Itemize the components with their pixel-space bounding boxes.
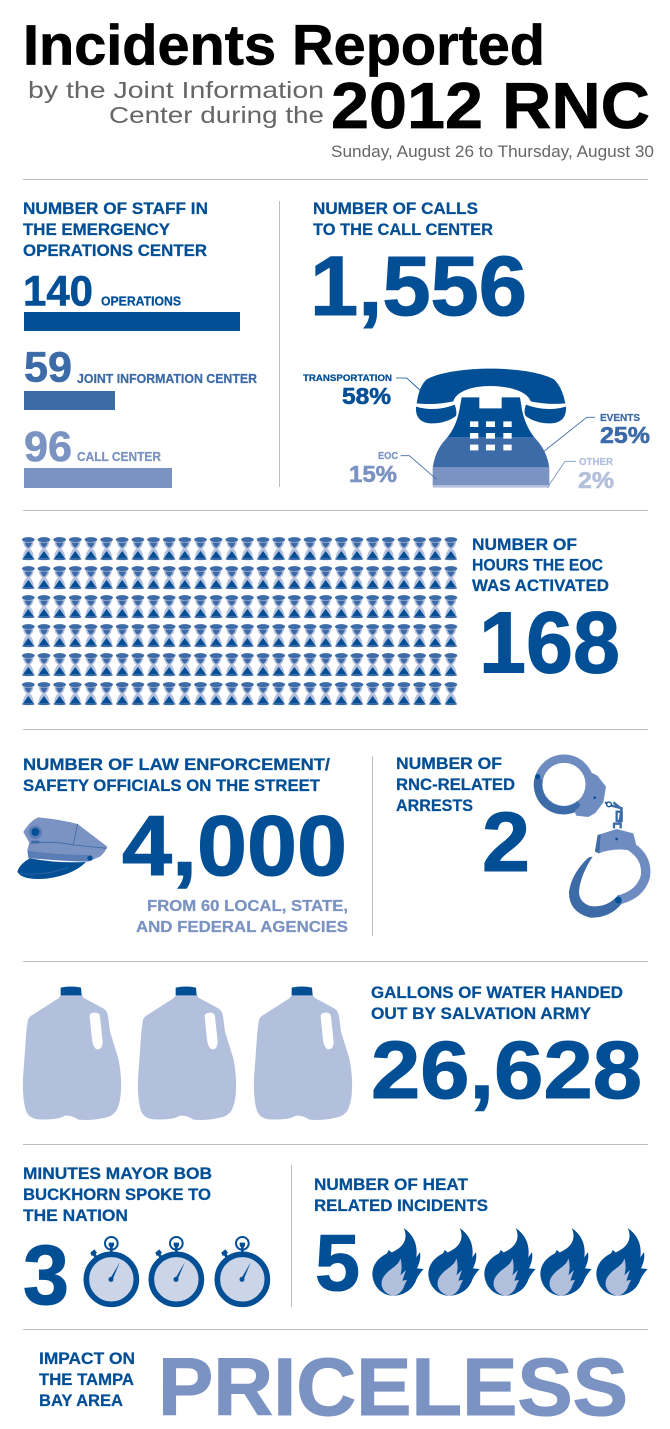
- heading: arrests: RNC-RELATED: [396, 776, 515, 794]
- stat: 59 joint information center: JOINT INFORMATION CENTER: [77, 372, 257, 386]
- caption: agencies: [136, 898, 348, 936]
- heading: hours: WAS ACTIVATED: [472, 577, 609, 595]
- stat: 140 operations: 140: [23, 268, 93, 316]
- big number: 5: 5: [315, 1218, 360, 1307]
- heading: minutes: BUCKHORN SPOKE TO: [23, 1186, 211, 1204]
- label: transportation 58%: TRANSPORTATION: [303, 373, 392, 384]
- icon: water jug 1: [23, 986, 121, 1120]
- label: events 25%: EVENTS: [600, 413, 640, 424]
- big number: 1,556: 1,556: [310, 239, 527, 333]
- heading: hours: [472, 536, 609, 595]
- subtitle: by the joint information center: [28, 77, 324, 128]
- big number: 2: 2: [482, 795, 530, 889]
- label: other 2%: OTHER: [579, 457, 614, 468]
- heading: law enforcement: [23, 756, 330, 795]
- heading: hours: NUMBER OF: [472, 536, 577, 554]
- stat: 96 call center: CALL CENTER: [77, 450, 161, 464]
- heading: law enforcement: NUMBER OF LAW ENFORCEMENT/: [23, 756, 330, 774]
- label: events 25%: [600, 413, 650, 448]
- icon: police cap: [17, 817, 107, 879]
- heading: gallons: GALLONS OF WATER HANDED: [371, 984, 623, 1002]
- heading: minutes: [23, 1165, 212, 1225]
- subtitle: by the joint information center: Center during the: [109, 102, 324, 128]
- heading: heat: [314, 1176, 488, 1215]
- icon: flame 5: [596, 1228, 648, 1296]
- stat: 59 joint information center: [24, 344, 257, 410]
- icon: stopwatch 1: [86, 1237, 136, 1304]
- big number: 4,000: 4,000: [122, 799, 347, 894]
- caption: agencies: FROM 60 LOCAL, STATE,: [147, 898, 348, 915]
- icon: flame 1: [372, 1228, 424, 1296]
- stat: 140 operations: [23, 268, 240, 331]
- panel: gallons of water: [23, 984, 642, 1120]
- label: eoc 15%: [349, 451, 398, 487]
- panel: impact: [39, 1342, 628, 1429]
- label: events 25%: 25%: [600, 422, 650, 448]
- heading: heat: NUMBER OF HEAT: [314, 1176, 468, 1194]
- panel: law enforcement officials: [17, 756, 348, 936]
- heading: arrests: NUMBER OF: [396, 755, 502, 773]
- icon: telephone chart: [396, 369, 595, 488]
- icon: water jug 2: [138, 986, 236, 1120]
- stat: 59 joint information center: 59: [24, 344, 72, 392]
- icon: stopwatch 3: [217, 1237, 267, 1304]
- heading: minutes: THE NATION: [23, 1207, 128, 1225]
- heading: calls: [313, 200, 493, 239]
- heading: impact: [39, 1350, 135, 1410]
- label: other 2%: 2%: [578, 467, 614, 493]
- panel: hours the EOC was activated: [22, 536, 620, 705]
- title: 2012 RNC: 2012 RNC: [331, 69, 650, 142]
- caption: agencies: AND FEDERAL AGENCIES: [136, 919, 348, 936]
- stat: 96 call center: [24, 423, 172, 488]
- big number: 3: 3: [23, 1228, 69, 1322]
- big number: 26,628: 26,628: [371, 1025, 642, 1116]
- heading: law enforcement: SAFETY OFFICIALS ON THE STREET: [23, 777, 320, 795]
- heading: arrests: [396, 755, 515, 815]
- panel: staff in the emergency operations center: [23, 200, 257, 488]
- panel: minutes mayor spoke: [23, 1165, 267, 1322]
- panel: heat related incidents: [314, 1176, 648, 1307]
- stat: 140 operations: OPERATIONS: [101, 294, 181, 308]
- heading: staff: [23, 200, 208, 260]
- icon: flame 3: [484, 1228, 536, 1296]
- heading: minutes: MINUTES MAYOR BOB: [23, 1165, 212, 1183]
- icon: stopwatch 2: [151, 1237, 201, 1304]
- big number: 168: 168: [479, 594, 620, 692]
- heading: calls: TO THE CALL CENTER: [313, 221, 493, 239]
- heading: staff: OPERATIONS CENTER: [23, 242, 207, 260]
- icon: water jug 3: [254, 986, 352, 1120]
- title block: [23, 14, 654, 161]
- heading: calls: NUMBER OF CALLS: [313, 200, 478, 218]
- heading: heat: RELATED INCIDENTS: [314, 1197, 488, 1215]
- label: transportation 58%: 58%: [342, 383, 391, 409]
- label: transportation 58%: [303, 373, 392, 409]
- label: eoc 15%: 15%: [349, 461, 397, 487]
- panel: arrests: [396, 755, 646, 918]
- heading: staff: NUMBER OF STAFF IN: [23, 200, 208, 218]
- icon: flame 4: [540, 1228, 592, 1296]
- label: other 2%: [578, 457, 614, 493]
- heading: impact: BAY AREA: [39, 1392, 123, 1410]
- panel: calls to the call center: [303, 200, 650, 493]
- icon: handcuffs: [535, 759, 646, 918]
- heading: gallons: OUT BY SALVATION ARMY: [371, 1005, 591, 1023]
- title: incidents reported: Incidents Reported: [23, 14, 545, 78]
- heading: gallons: [371, 984, 623, 1023]
- heading: impact: IMPACT ON: [39, 1350, 135, 1368]
- heading: staff: THE EMERGENCY: [23, 221, 170, 239]
- icon: flame 2: [428, 1228, 480, 1296]
- hourglass grid: 168 icons: [22, 537, 457, 705]
- heading: hours: HOURS THE EOC: [472, 556, 603, 574]
- subtitle: by the joint information center: by the Joint Information: [28, 77, 324, 103]
- date range: Sunday, August 26 to Thursday, August 30: [331, 143, 654, 161]
- stat: 96 call center: 96: [24, 423, 72, 471]
- label: eoc 15%: EOC: [378, 451, 398, 462]
- heading: arrests: ARRESTS: [396, 797, 473, 815]
- heading: impact: THE TAMPA: [39, 1371, 134, 1389]
